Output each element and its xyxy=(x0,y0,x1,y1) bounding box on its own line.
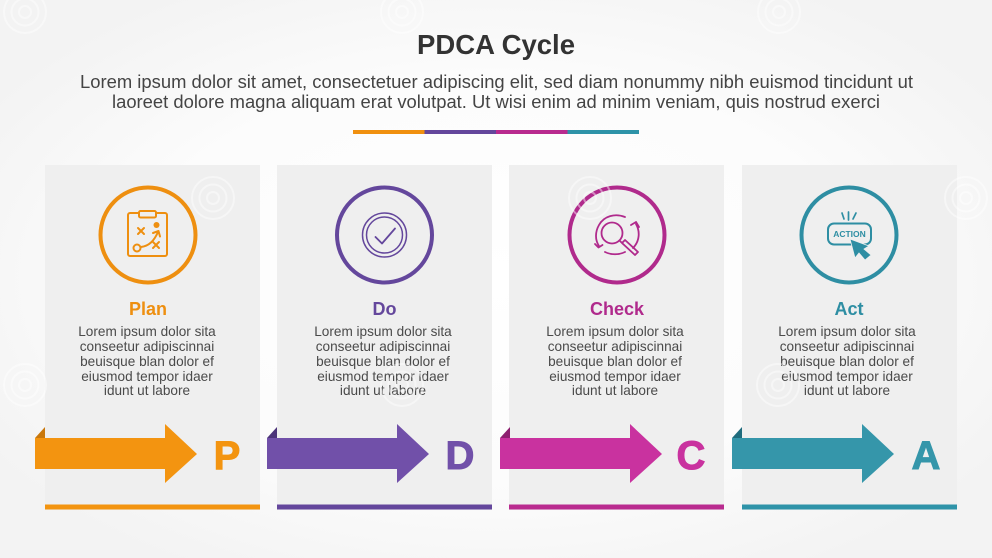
text block: Plan: Lorem ipsum dolor sita xyxy=(78,324,216,339)
title: PDCA Cycle xyxy=(417,29,575,60)
letter: P: P xyxy=(214,434,240,478)
heading: Do: Do xyxy=(372,299,396,319)
text block: Check: conseetur adipiscinnai xyxy=(548,339,682,354)
text block: Plan: beuisque blan dolor ef xyxy=(80,354,214,369)
heading: Act: Act xyxy=(834,299,864,319)
icon: clipboard game plan xyxy=(100,188,196,282)
subtitle text: Lorem ipsum dolor sit amet, consectetuer adipiscing elit, sed diam nonummy nibh euismod tincidunt ut xyxy=(80,72,913,92)
text block: Act: Lorem ipsum dolor sita xyxy=(778,324,916,339)
arrow: P xyxy=(35,424,197,483)
text block: Do: idunt ut labore xyxy=(340,383,426,398)
arrow: D xyxy=(267,424,429,483)
panel: Plan xyxy=(35,165,260,510)
icon: action button with cursor xyxy=(802,188,896,282)
icon: action button with cursor: ACTION xyxy=(833,229,866,239)
text block: Act: eiusmod tempor idaer xyxy=(781,369,913,384)
text block: Plan: conseetur adipiscinnai xyxy=(80,339,214,354)
panel: Act xyxy=(732,165,957,510)
letter: D: D xyxy=(446,434,474,478)
text block: Plan xyxy=(78,324,216,398)
arrow: C xyxy=(500,424,662,483)
text block: Check: beuisque blan dolor ef xyxy=(548,354,682,369)
text block: Do: beuisque blan dolor ef xyxy=(316,354,450,369)
letter: C: C xyxy=(677,434,705,478)
text block: Check: Lorem ipsum dolor sita xyxy=(546,324,684,339)
text block: Check: idunt ut labore xyxy=(572,383,658,398)
subtitle text: laoreet dolore magna aliquam erat volutpat. Ut wisi enim ad minim veniam, quis nostrud exerci xyxy=(112,92,880,112)
subtitle text xyxy=(80,72,913,112)
letter: A: A xyxy=(912,434,940,478)
text block: Plan: eiusmod tempor idaer xyxy=(81,369,213,384)
text block: Act: conseetur adipiscinnai xyxy=(780,339,914,354)
text block: Act: idunt ut labore xyxy=(804,383,890,398)
text block: Do: Lorem ipsum dolor sita xyxy=(314,324,452,339)
heading: Check: Check xyxy=(590,299,645,319)
panel: Do xyxy=(267,165,492,510)
text block: Check: eiusmod tempor idaer xyxy=(549,369,681,384)
heading: Plan: Plan xyxy=(129,299,167,319)
arrow: A xyxy=(732,424,894,483)
text block: Do: conseetur adipiscinnai xyxy=(316,339,450,354)
text block: Act xyxy=(778,324,916,398)
text block: Do xyxy=(314,324,452,398)
text block: Check xyxy=(546,324,684,398)
colour divider xyxy=(353,130,639,134)
icon: check mark xyxy=(337,188,432,282)
icon: magnifier with cycle arrows xyxy=(570,188,664,282)
text block: Do: eiusmod tempor idaer xyxy=(317,369,449,384)
panel: Check xyxy=(500,165,724,510)
text block: Plan: idunt ut labore xyxy=(104,383,190,398)
text block: Act: beuisque blan dolor ef xyxy=(780,354,914,369)
